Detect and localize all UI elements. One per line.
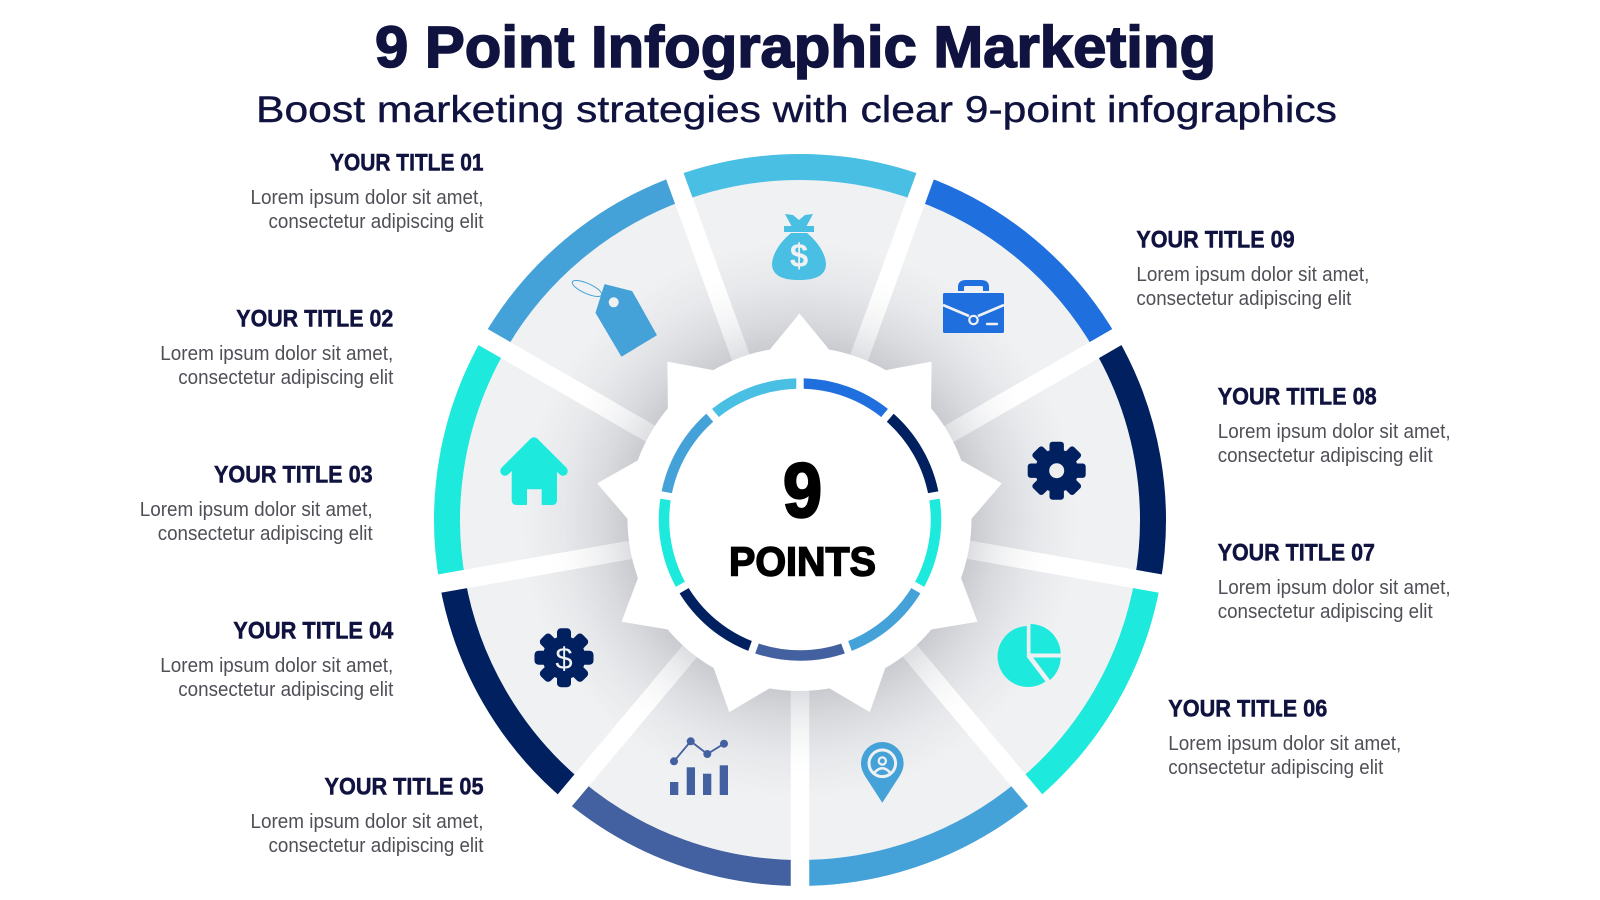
subtitle: Boost marketing strategies with clear 9-point infographics (256, 89, 1337, 130)
text block: title 07: Lorem ipsum dolor sit amet, (1218, 576, 1451, 599)
inner ring gaps (655, 372, 945, 658)
icon: dollar gear: $ (555, 641, 573, 676)
text block: title 08: consectetur adipiscing elit (1218, 444, 1433, 467)
text block: title 07 (1218, 540, 1451, 623)
text block: title 02: YOUR TITLE 02 (236, 306, 393, 332)
text block: title 04: consectetur adipiscing elit (178, 678, 394, 701)
grey disc (455, 175, 1145, 865)
text block: title 06: YOUR TITLE 06 (1168, 696, 1327, 722)
icon: gear (1028, 442, 1086, 500)
text block: title 09: consectetur adipiscing elit (1136, 287, 1352, 310)
text block: title 08 (1218, 384, 1451, 467)
text block: title 03: Lorem ipsum dolor sit amet, (140, 498, 373, 521)
separator bands (436, 172, 1164, 890)
text block: title 04: Lorem ipsum dolor sit amet, (160, 654, 393, 677)
text block: title 05: YOUR TITLE 05 (324, 774, 484, 800)
text block: title 07: consectetur adipiscing elit (1218, 600, 1433, 623)
text block: title 01: YOUR TITLE 01 (330, 150, 484, 176)
icon: money bag (772, 214, 826, 280)
title: 9 Point Infographic Marketing (375, 15, 1216, 80)
circular diagram (436, 167, 1164, 890)
text block: title 04: YOUR TITLE 04 (233, 618, 394, 644)
icon: money bag: $ (790, 237, 808, 274)
centre number: 9 (783, 448, 822, 534)
icon: price tag (570, 277, 656, 356)
text block: title 01: consectetur adipiscing elit (268, 210, 484, 233)
text block: title 09: Lorem ipsum dolor sit amet, (1136, 263, 1369, 286)
text block: title 02: consectetur adipiscing elit (178, 366, 394, 389)
icon: house (505, 442, 563, 505)
centre label: POINTS (729, 538, 876, 584)
text block: title 03: YOUR TITLE 03 (214, 462, 373, 488)
text block: title 02 (160, 306, 394, 389)
text block: title 01: Lorem ipsum dolor sit amet, (250, 186, 484, 209)
text block: title 03: consectetur adipiscing elit (158, 522, 373, 545)
icon: location pin (861, 742, 904, 803)
icon: dollar gear (534, 628, 594, 687)
text block: title 06: consectetur adipiscing elit (1168, 756, 1384, 779)
inner ring segments (664, 383, 936, 655)
icon: pie chart (998, 624, 1061, 687)
text block: title 06: Lorem ipsum dolor sit amet, (1168, 732, 1401, 755)
text block: title 05: Lorem ipsum dolor sit amet, (250, 810, 484, 833)
text block: title 04 (160, 618, 394, 701)
centre shadow (460, 180, 1140, 860)
text block: title 06 (1168, 696, 1401, 779)
text block: title 02: Lorem ipsum dolor sit amet, (160, 342, 393, 365)
outer ring segments (447, 167, 1153, 873)
white nine-point star (592, 314, 1007, 722)
text block: title 03 (140, 462, 373, 545)
text block: title 08: YOUR TITLE 08 (1218, 384, 1377, 410)
text block: title 01 (250, 150, 484, 233)
text block: title 05: consectetur adipiscing elit (268, 834, 484, 857)
text block: title 09: YOUR TITLE 09 (1136, 226, 1295, 254)
text block: title 08: Lorem ipsum dolor sit amet, (1218, 420, 1451, 443)
text block: title 07: YOUR TITLE 07 (1218, 540, 1375, 566)
text block: title 09 (1136, 226, 1369, 310)
text block: title 05 (250, 774, 484, 857)
icon: briefcase (943, 280, 1004, 333)
icon: bar and line chart (670, 737, 728, 795)
